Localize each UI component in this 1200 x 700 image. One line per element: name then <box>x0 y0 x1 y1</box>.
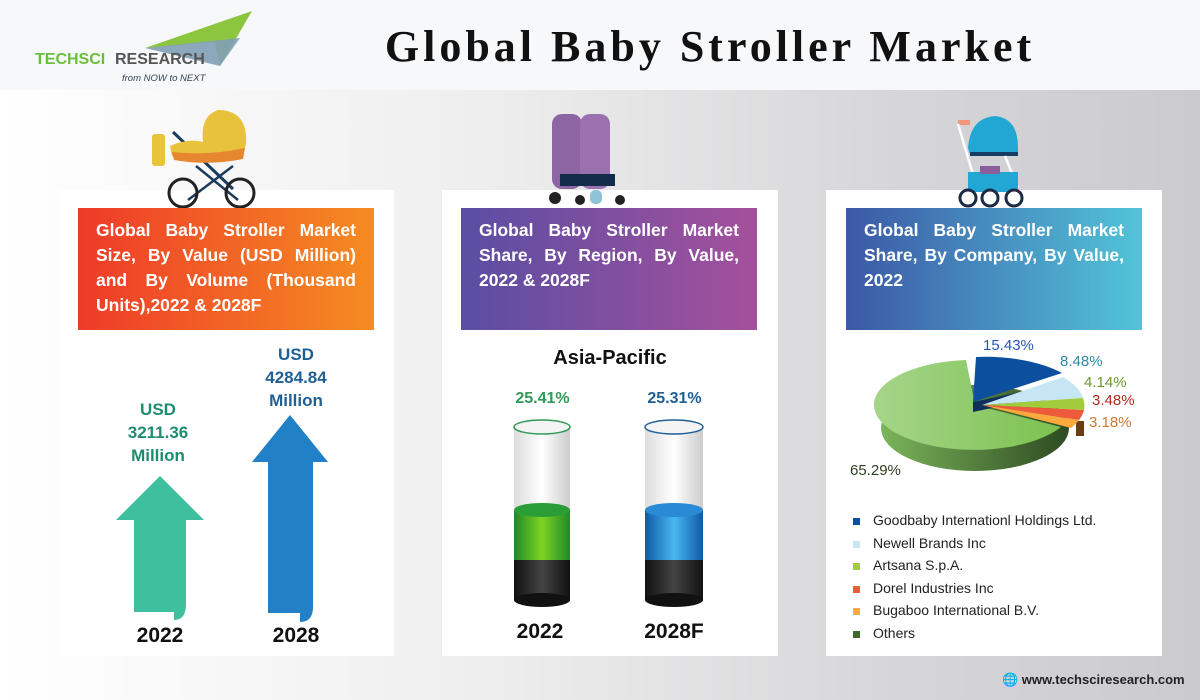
label: 25.41%: 25.41% <box>515 390 570 407</box>
legend: Goodbaby Internationl Holdings Ltd. <box>873 512 1096 528</box>
logo <box>35 11 252 83</box>
label: 2028 value: Million <box>269 391 323 410</box>
chart: pie <box>874 356 1084 471</box>
pie labels: 15.43% <box>983 337 1034 354</box>
heading box: company: Global Baby Stroller Market Share, By Company, By Value, 2022 <box>864 220 1124 290</box>
label: 25.31%: 25.31% <box>647 390 702 407</box>
logo: RESEARCH <box>115 51 205 68</box>
header band <box>0 0 1200 90</box>
panel: company <box>826 190 1162 656</box>
heading box: region: Global Baby Stroller Market Share, By Region, By Value, 2022 & 2028F <box>479 220 739 290</box>
text: 65.29% <box>850 462 901 479</box>
heading box: company <box>846 208 1142 330</box>
label: 2028 value: 4284.84 <box>265 368 327 387</box>
label: 2028 value: USD <box>278 345 314 364</box>
legend: Dorel Industries Inc <box>873 580 994 596</box>
logo: TECHSCI <box>35 51 105 68</box>
region name: Asia-Pacific <box>553 347 667 369</box>
icon: twin stroller <box>549 114 625 205</box>
legend: Newell Brands Inc <box>873 534 986 550</box>
label: 2022 value: 3211.36 <box>128 423 188 442</box>
text: 2028 <box>273 624 319 647</box>
year labels panel 2: 2022 <box>517 620 563 643</box>
icon: blue pram <box>957 116 1024 208</box>
panel: region <box>442 190 778 656</box>
title: Global Baby Stroller Market <box>385 22 1035 71</box>
label: 2028 value <box>265 345 327 410</box>
heading box: region <box>461 208 757 330</box>
text: 2028F <box>644 620 704 643</box>
label: 2022 value <box>128 400 188 465</box>
text: 3.48% <box>1092 392 1135 409</box>
legend: Artsana S.p.A. <box>873 557 963 573</box>
arrow: 2022 <box>116 476 204 620</box>
heading box: size <box>78 208 374 330</box>
heading box: size: Global Baby Stroller Market Size, By Value (USD Million) and By Volume (Thousand Units),2022 & 2028F <box>96 220 356 315</box>
text: 3.18% <box>1089 414 1132 431</box>
text: 8.48% <box>1060 353 1103 370</box>
panel: market size <box>58 190 394 656</box>
legend: Others <box>873 624 915 640</box>
icon: yellow pram <box>152 110 256 208</box>
text: 4.14% <box>1084 374 1127 391</box>
footer url: 🌐 www.techsciresearch.com <box>1002 672 1185 687</box>
legend <box>853 512 1096 640</box>
label: 2022 value: USD <box>140 400 176 419</box>
chart: cylinders <box>513 419 704 607</box>
arrow: 2028 <box>252 415 328 622</box>
year labels panel 1: 2022 <box>137 624 183 647</box>
legend: Bugaboo International B.V. <box>873 602 1039 618</box>
label: 2022 value: Million <box>131 446 185 465</box>
